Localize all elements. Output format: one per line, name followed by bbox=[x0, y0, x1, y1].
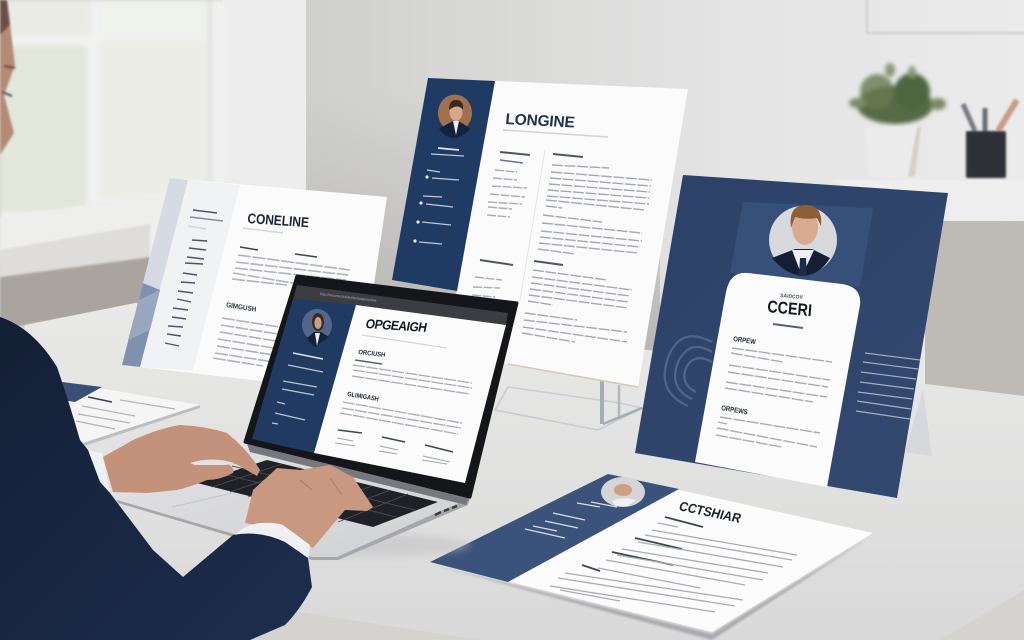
resume sheet on desk bbox=[430, 474, 873, 640]
base bbox=[117, 447, 470, 557]
plant in pot bbox=[849, 63, 946, 178]
person: right hand bbox=[235, 465, 373, 562]
wall art frame bbox=[867, 0, 1024, 33]
person: left hand bbox=[87, 425, 260, 493]
body text bbox=[240, 247, 317, 257]
resume card: top centre bbox=[392, 78, 688, 387]
laptop: GLIMIGASH bbox=[347, 391, 380, 403]
resume card: right bbox=[635, 175, 948, 498]
white panel bbox=[695, 273, 860, 487]
acrylic stand bbox=[495, 372, 642, 430]
person: suit bbox=[0, 317, 312, 640]
resume card: left bbox=[122, 178, 387, 392]
decorative lines bbox=[856, 353, 920, 419]
column divider bbox=[520, 150, 545, 300]
column headings bbox=[480, 152, 583, 265]
laptop bbox=[117, 276, 517, 560]
trackpad seam bbox=[172, 490, 245, 507]
sidebar list bbox=[165, 210, 217, 346]
keyboard bbox=[197, 460, 438, 527]
sidebar text bbox=[293, 353, 323, 359]
resume card: right: ORPEWS bbox=[721, 405, 749, 417]
resume card: left: GIMGUSH bbox=[226, 302, 257, 314]
pen holder bbox=[963, 100, 1017, 178]
avatar bbox=[601, 477, 645, 507]
heading: CCERI bbox=[767, 298, 813, 321]
left cuff bbox=[87, 450, 110, 492]
columns bbox=[472, 170, 527, 297]
avatar bbox=[769, 205, 837, 276]
decorative arcs bbox=[665, 336, 712, 406]
sidebar text bbox=[525, 502, 617, 538]
laptop: http://resume.builder/template/online bbox=[320, 292, 377, 303]
shelf bbox=[830, 180, 1024, 396]
hinge bbox=[247, 444, 470, 505]
screen white bbox=[314, 305, 506, 483]
person: face edge bbox=[0, 0, 15, 155]
sidebar text bbox=[438, 148, 459, 150]
title: OPGEAIGH bbox=[364, 317, 428, 335]
heading: CCTSHIAR bbox=[677, 499, 743, 526]
laptop: ORCIUSH bbox=[358, 349, 386, 359]
resume card: right: SAIDCOV bbox=[780, 293, 804, 301]
screen bezel bbox=[245, 276, 517, 497]
window sill bbox=[0, 193, 170, 330]
desk bbox=[0, 303, 1024, 640]
title: CONELINE bbox=[247, 210, 310, 231]
text lines bbox=[582, 517, 703, 571]
avatar bbox=[302, 309, 332, 347]
browser bar bbox=[293, 285, 508, 325]
window bbox=[0, 0, 225, 260]
avatar bbox=[438, 94, 472, 138]
title: LONGINE bbox=[505, 111, 575, 131]
card easel: right bbox=[905, 390, 932, 456]
ports bbox=[435, 506, 457, 515]
contact dots bbox=[413, 175, 429, 243]
screen navy bbox=[252, 299, 356, 453]
right cuff bbox=[235, 523, 310, 562]
resume card: right: ORPEW bbox=[733, 336, 757, 346]
small sheet on desk bbox=[62, 382, 200, 446]
